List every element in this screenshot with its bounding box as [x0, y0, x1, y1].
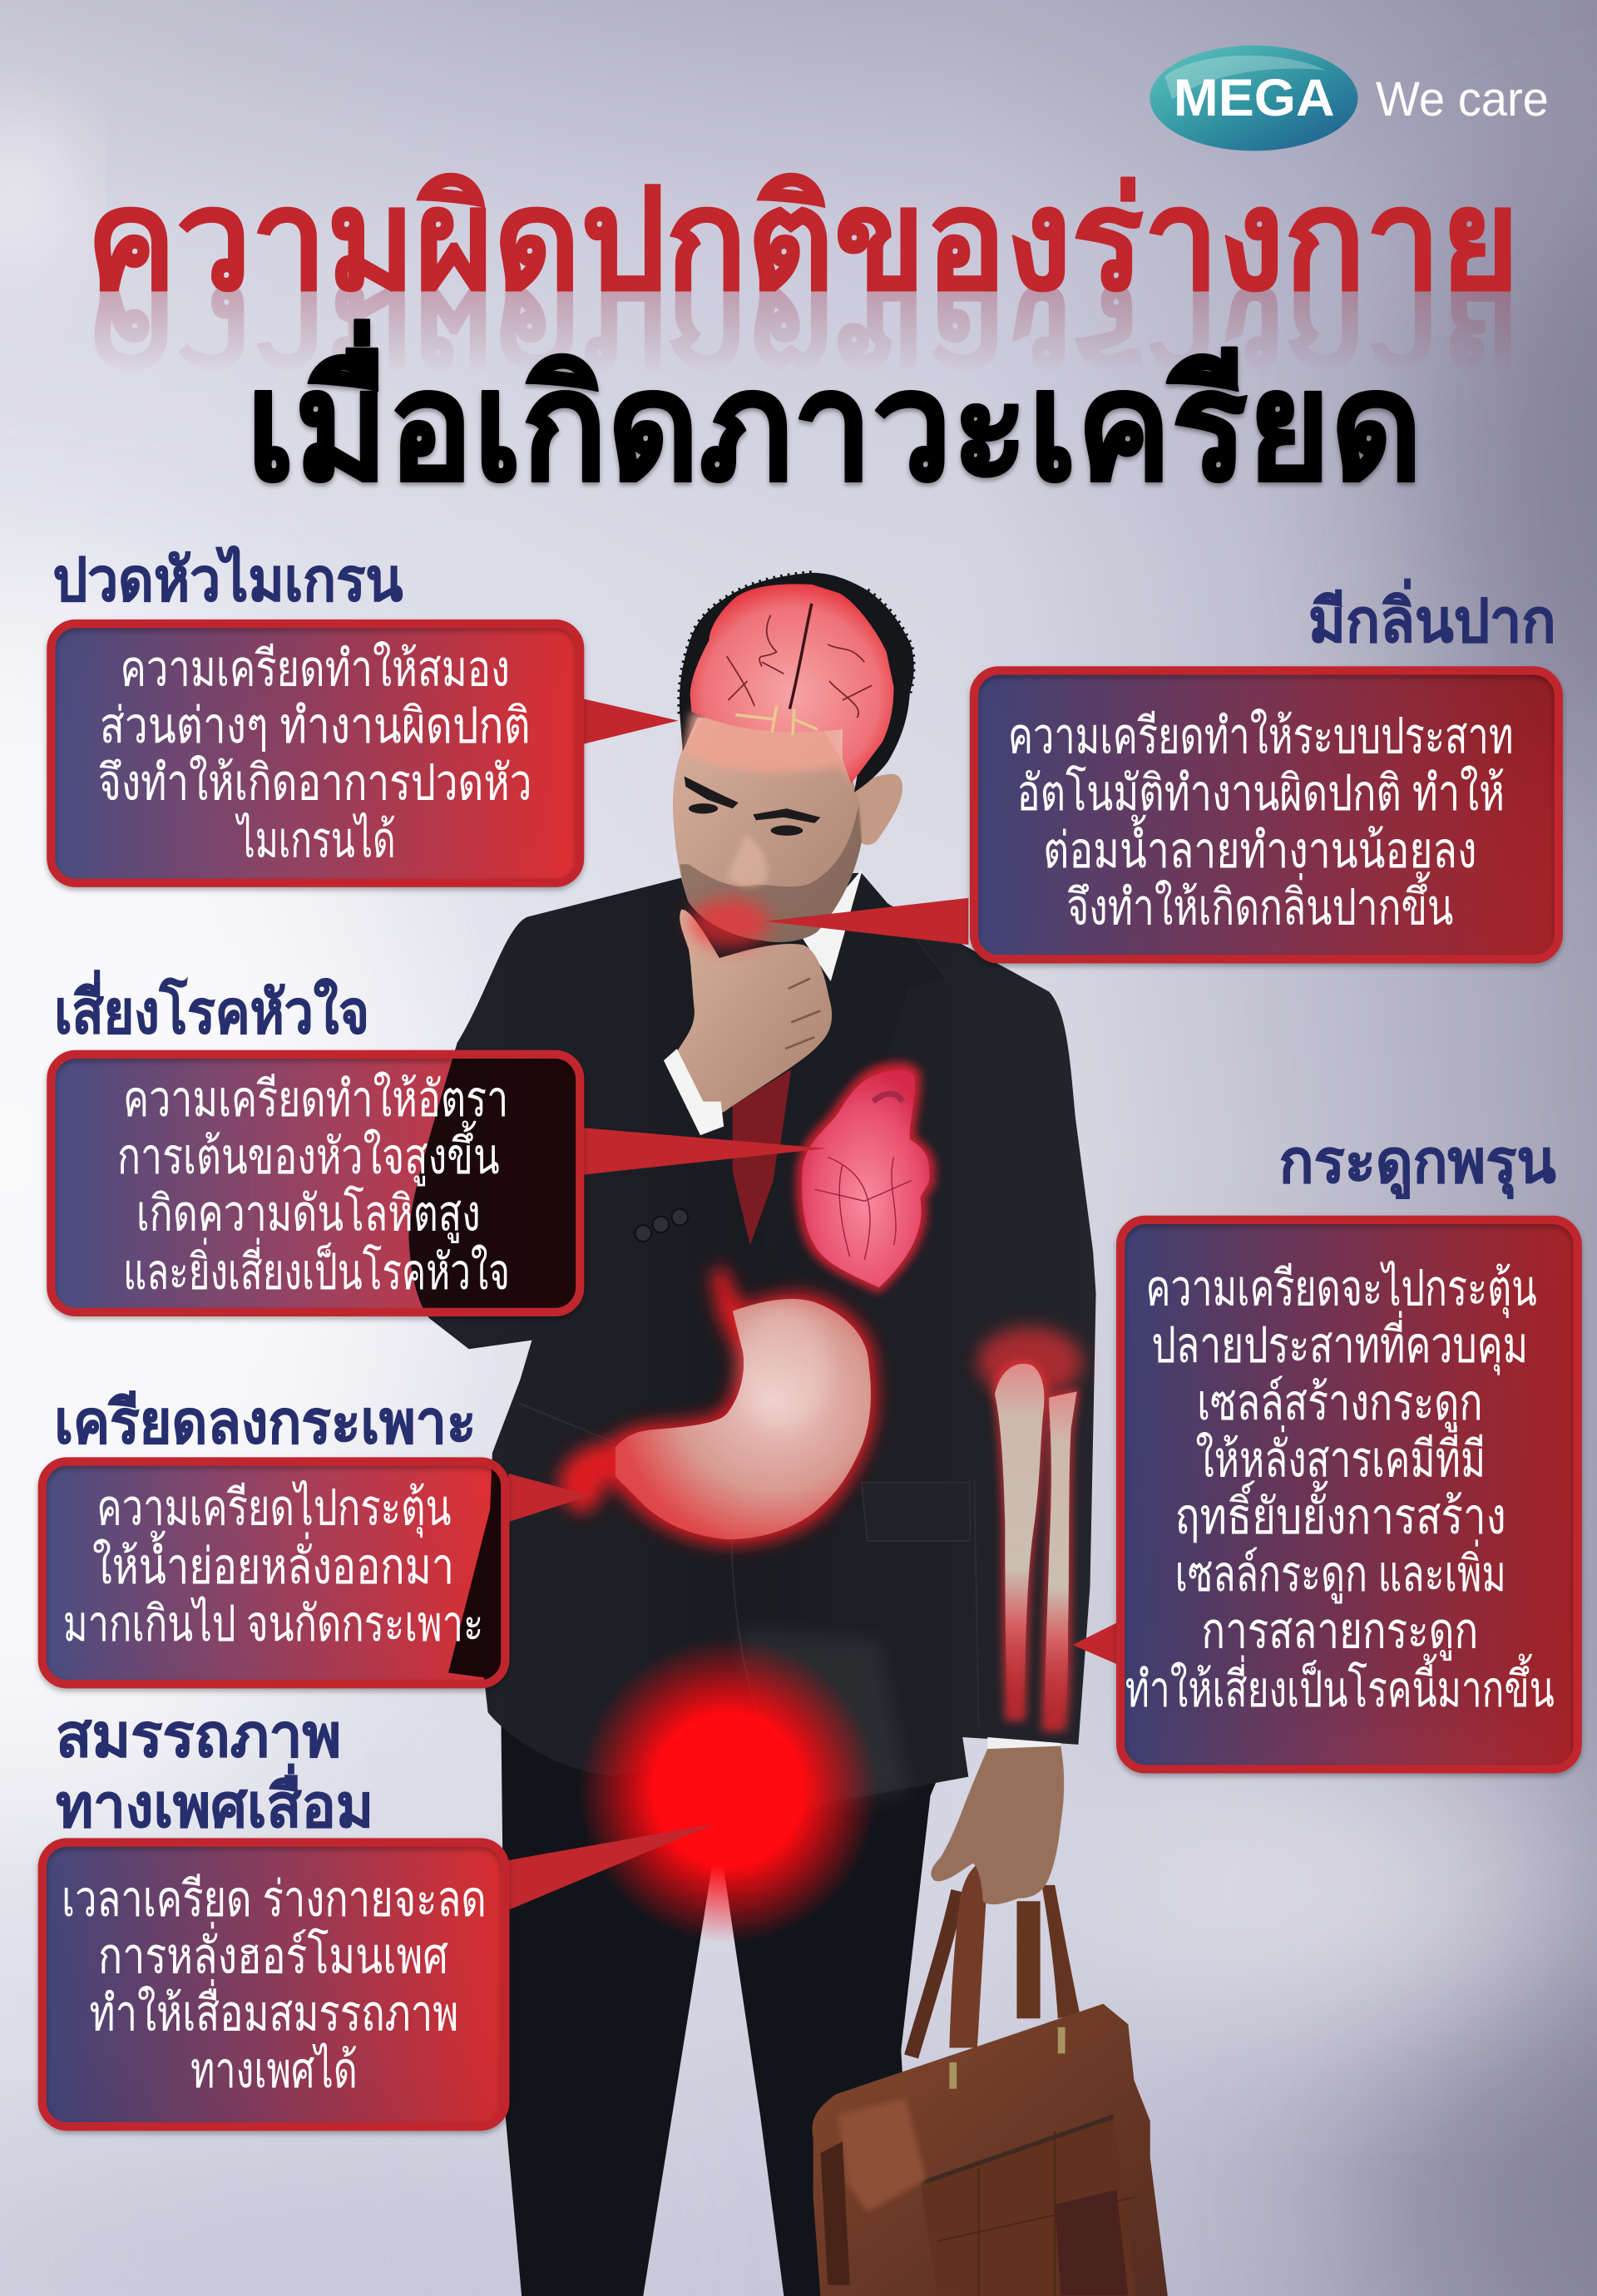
- bag hand: [931, 1746, 1064, 1904]
- callout: stomach: [42, 1462, 591, 1684]
- heading: migraine: ปวดหัวไมเกรน: [52, 545, 403, 614]
- text: impotence: เวลาเครียด ร่างกายจะลด: [62, 1871, 487, 1927]
- organ: groin glow: [579, 1637, 878, 1943]
- sleeve buttons: [635, 1209, 688, 1242]
- text: osteoporosis: เซลล์สร้างกระดูก: [1197, 1375, 1483, 1433]
- logo: MEGA We care: MEGA: [1174, 69, 1335, 127]
- text: bad breath: จึงทำให้เกิดกลิ่นปากขึ้น: [1066, 871, 1453, 935]
- text: heart disease: [117, 1071, 510, 1300]
- text: osteoporosis: การสลายกระดูก: [1201, 1603, 1478, 1662]
- bag hand cuff: [987, 1737, 1061, 1753]
- callout: bad breath: [764, 670, 1559, 959]
- text: impotence: ทางเพศได้: [190, 2042, 358, 2098]
- translucent jacket tail: [740, 1626, 908, 1808]
- eyebrows and eyes: [685, 777, 820, 836]
- text: heart disease: ความเครียดทำให้อัตรา: [123, 1071, 508, 1127]
- text: osteoporosis: [1125, 1260, 1555, 1717]
- heading: stomach: เครียดลงกระเพาะ: [54, 1390, 476, 1456]
- organ: arm bones: [977, 1327, 1083, 1731]
- text: impotence: [62, 1871, 487, 2098]
- heading: bad breath: มีกลิ่นปาก: [1308, 578, 1556, 654]
- callout: heart disease: [51, 1054, 826, 1312]
- bag: [812, 1864, 1168, 2296]
- text: stomach: [63, 1480, 483, 1652]
- text: osteoporosis: ฤทธิ์ยับยั้งการสร้าง: [1175, 1480, 1506, 1544]
- lapel right: [762, 873, 947, 1260]
- head: [673, 718, 863, 942]
- ear: [853, 774, 902, 845]
- shirt: [803, 870, 887, 981]
- heading: impotence line 2: ทางเพศเสื่อม: [56, 1763, 373, 1839]
- man figure: [408, 573, 1168, 2296]
- heading: impotence line 1: สมรรถภาพ: [56, 1703, 341, 1770]
- text: heart disease: เกิดความดันโลหิตสูง: [136, 1185, 481, 1244]
- text: stomach: ให้น้ำย่อยหลั่งออกมา: [92, 1531, 454, 1594]
- shirt cuff: [664, 1049, 724, 1135]
- brain: [683, 584, 893, 783]
- text: migraine: ส่วนต่างๆ ทำงานผิดปกติ: [100, 698, 531, 753]
- nose: [728, 835, 768, 886]
- text: bad breath: ต่อมน้ำลายทำงานน้อยลง: [1043, 815, 1477, 878]
- jacket: [408, 873, 1096, 1810]
- callout: impotence: [42, 1824, 715, 2126]
- hair: [680, 573, 914, 792]
- logo: MEGA We care: We care: [1376, 72, 1549, 126]
- logo: MEGA We care: [1150, 46, 1549, 151]
- text: migraine: [98, 640, 532, 867]
- sleeve and pocket details: [519, 904, 979, 1809]
- beard: [680, 806, 862, 942]
- organ: heart: [796, 1062, 936, 1293]
- jacket stomach-box wedge: [448, 1472, 502, 1680]
- heading: osteoporosis: กระดูกพรุน: [1279, 1128, 1556, 1199]
- hand at chin: [677, 910, 832, 1113]
- text: migraine: ความเครียดทำให้สมอง: [120, 640, 510, 696]
- text: osteoporosis: ให้หลั่งสารเคมีที่มี: [1195, 1425, 1486, 1487]
- title line 2: เมื่อเกิดภาวะเครียด: [246, 320, 1422, 511]
- title reflection: ความผิดปกติของร่างกาย: [87, 259, 1520, 416]
- text: heart disease: และยิ่งเสี่ยงเป็นโรคหัวใจ: [123, 1237, 510, 1300]
- trousers: [501, 1721, 952, 2296]
- text: stomach: มากเกินไป จนกัดกระเพาะ: [63, 1596, 483, 1652]
- organ: stomach: [558, 1266, 877, 1545]
- text: impotence: การหลั่งฮอร์โมนเพศ: [98, 1922, 448, 1984]
- heading: heart disease: เสี่ยงโรคหัวใจ: [54, 970, 369, 1046]
- text: migraine: จึงทำให้เกิดอาการปวดหัว: [98, 755, 532, 811]
- text: impotence: ทำให้เสื่อมสมรรถภาพ: [89, 1978, 458, 2041]
- title line 1: ความผิดปกติของร่างกาย: [87, 161, 1520, 318]
- text: bad breath: [1008, 708, 1514, 935]
- text: migraine: ไมเกรนได้: [235, 812, 396, 867]
- mouth glow: [689, 898, 771, 948]
- text: heart disease: การเต้นของหัวใจสูงขึ้น: [117, 1121, 500, 1187]
- tie: [733, 1069, 791, 1245]
- callout: migraine: [51, 624, 679, 883]
- text: stomach: ความเครียดไปกระตุ้น: [96, 1480, 452, 1538]
- callout: osteoporosis: [1072, 1220, 1578, 1769]
